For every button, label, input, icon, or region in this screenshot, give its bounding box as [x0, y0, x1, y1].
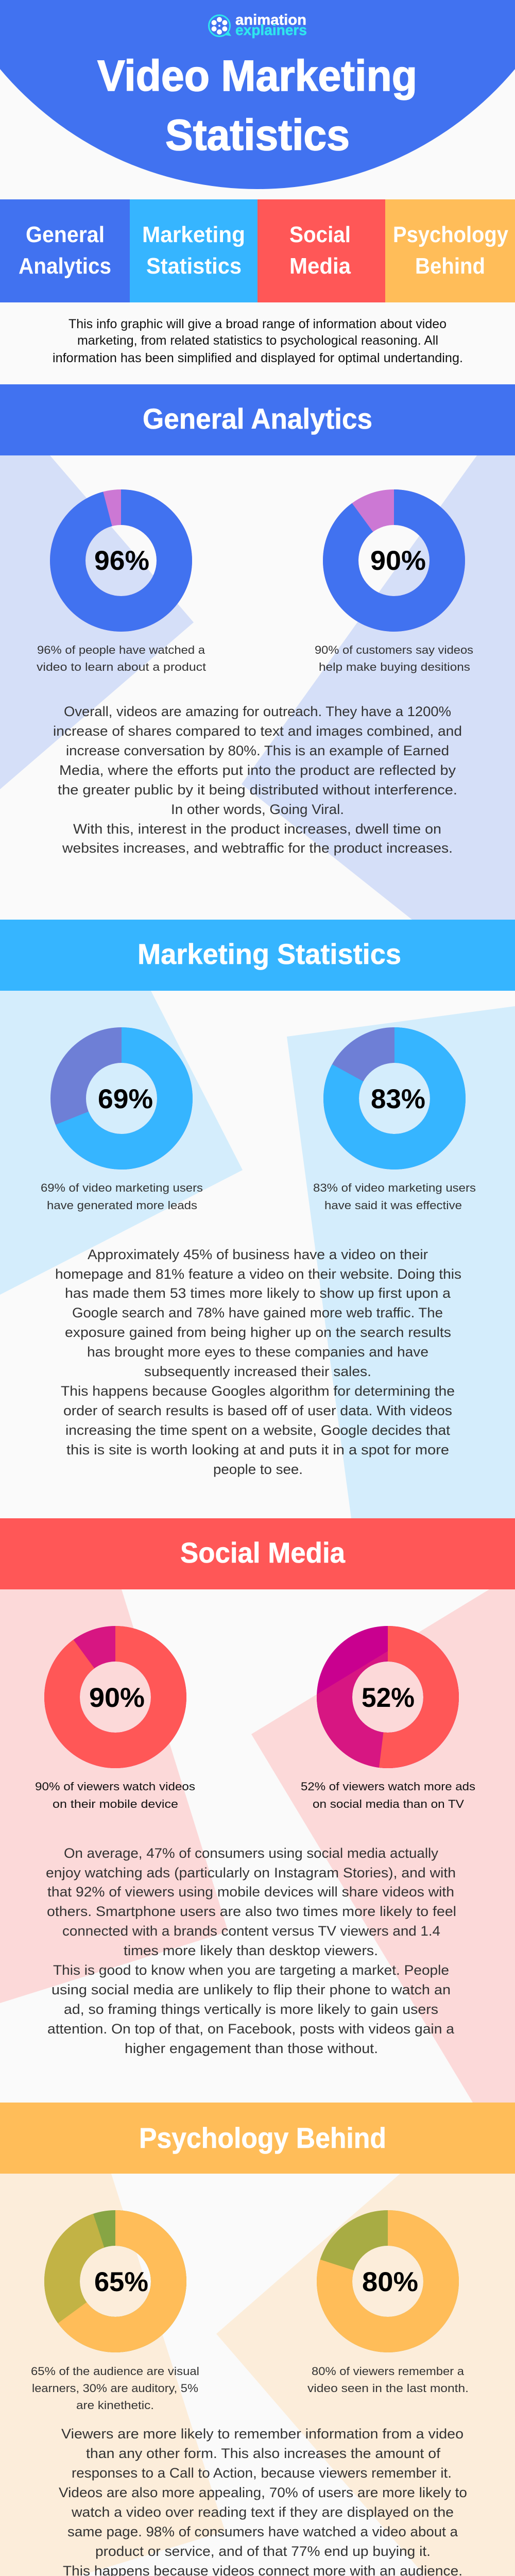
caption: 90%: 90% of viewers watch videos: [35, 1780, 195, 1793]
tab: Marketing Statistics: Statistics: [146, 253, 242, 279]
caption: 90%: [35, 1780, 195, 1810]
heading: Social Media: [180, 1536, 346, 1569]
body text: subsequently increased their sales.: [144, 1364, 371, 1379]
tab: Marketing Statistics: [130, 199, 258, 302]
intro text: information has been simplified and displayed for optimal undertanding.: [53, 351, 463, 365]
body text: the greater public by it being distributed without interference.: [58, 782, 457, 798]
tab: Psychology Behind: Behind: [415, 253, 485, 279]
body text: has made them 53 times more likely to show up first upon a: [65, 1285, 451, 1301]
panel: Social Media: [0, 1518, 515, 2103]
body text: Google search and 78% have gained more web traffic. The: [72, 1305, 443, 1320]
title: Statistics: [165, 111, 350, 159]
donut chart: 96%: [68, 507, 174, 614]
caption: 83%: have said it was effective: [324, 1199, 462, 1212]
body text: this is site is worth looking at and puts it in a spot for more: [66, 1442, 449, 1458]
caption: 52%: [301, 1780, 475, 1810]
donut chart: 65%: [62, 2228, 169, 2335]
caption: 90%: [315, 643, 473, 673]
body text: In other words, Going Viral.: [171, 802, 344, 817]
heading: Psychology Behind: [139, 2122, 386, 2154]
body text: using social media are unlikely to flip their phone to watch an: [52, 1982, 451, 1997]
body text: This happens because Googles algorithm for determining the: [61, 1383, 455, 1399]
donut chart: 90%: 90%: [370, 546, 426, 576]
tab: Marketing Statistics: Marketing: [142, 222, 245, 247]
body text: order of search results is based off of user data. With videos: [63, 1403, 452, 1418]
caption: 90%: 90% of customers say videos: [315, 643, 473, 656]
caption: 96%: video to learn about a product: [37, 660, 206, 673]
body text: increasing the time spent on a website, Google decides that: [65, 1422, 451, 1438]
caption: 52%: on social media than on TV: [313, 1798, 464, 1810]
body text: increase conversation by 80%. This is an example of Earned: [66, 743, 449, 758]
caption: 80%: [307, 2365, 469, 2395]
body text: exposure gained from being higher up on the search results: [65, 1325, 451, 1340]
body text: watch a video over reading text if they are displayed on the: [71, 2504, 454, 2520]
body text: Videos are also more appealing, 70% of users are more likely to: [59, 2485, 467, 2500]
tab: Social Media: [258, 199, 385, 302]
body text: Media, where the efforts put into the product are reflected by: [59, 762, 456, 778]
body text: same page. 98% of consumers have watched a video about a: [67, 2524, 458, 2539]
donut chart: 96%: 96%: [94, 546, 149, 576]
body text: With this, interest in the product increases, dwell time on: [73, 821, 441, 837]
tab: General Analytics: [0, 199, 130, 302]
body text: has brought more eyes to these companies and have: [87, 1344, 428, 1360]
caption: 65%: 65% of the audience are visual: [31, 2365, 199, 2378]
intro text: [53, 317, 463, 365]
tab: Social Media: Social: [289, 222, 351, 247]
navigation tabs: [0, 199, 515, 302]
caption: 80%: 80% of viewers remember a: [312, 2365, 465, 2378]
body text: ad, so framing things vertically is more likely to gain users: [64, 2002, 438, 2017]
body text: [55, 1247, 461, 1477]
panel: Psychology Behind: [0, 2103, 515, 2576]
body text: responses to a Call to Action, because viewers remember it.: [72, 2465, 452, 2481]
logo: animation explainers: [209, 12, 307, 39]
title: Video Marketing: [97, 52, 417, 100]
caption: 52%: 52% of viewers watch more ads: [301, 1780, 475, 1793]
body text: connected with a brands content versus TV viewers and 1.4: [62, 1923, 440, 1939]
body text: increase of shares compared to text and images combined, and: [53, 723, 462, 739]
body text: than any other form. This also increases the amount of: [86, 2446, 441, 2461]
caption: 83%: [313, 1181, 476, 1212]
donut chart: 90%: 90%: [89, 1683, 145, 1713]
body text: websites increases, and webtraffic for the product increases.: [62, 840, 453, 856]
caption: 65%: learners, 30% are auditory, 5%: [32, 2382, 198, 2395]
body text: people to see.: [213, 1462, 303, 1477]
caption: 80%: video seen in the last month.: [307, 2382, 469, 2395]
body text: homepage and 81% feature a video on their website. Doing this: [55, 1266, 461, 1282]
logo: animation explainers: explainers: [235, 22, 307, 39]
body text: This is good to know when you are targeting a market. People: [53, 1962, 449, 1978]
body text: On average, 47% of consumers using social media actually: [64, 1845, 439, 1861]
body text: that 92% of viewers using mobile devices will share videos with: [47, 1884, 454, 1900]
intro text: This info graphic will give a broad range of information about video: [68, 317, 447, 331]
body text: Approximately 45% of business have a video on their: [88, 1247, 428, 1262]
body text: product or service, and of that 77% end up buying it.: [95, 2544, 431, 2559]
caption: 69%: have generated more leads: [47, 1199, 197, 1212]
tab: General Analytics: Analytics: [19, 253, 111, 279]
body text: attention. On top of that, on Facebook, posts with videos gain a: [47, 2021, 455, 2037]
caption: 90%: help make buying desitions: [319, 660, 470, 673]
donut chart: 80%: [335, 2228, 441, 2335]
body text: others. Smartphone users are also two times more likely to feel: [47, 1904, 456, 1919]
body text: Viewers are more likely to remember information from a video: [61, 2426, 464, 2442]
donut chart: 83%: [341, 1045, 448, 1152]
body text: [53, 704, 462, 856]
title: [97, 52, 417, 159]
logo: animation explainers: animation: [235, 12, 306, 28]
donut chart: 83%: 83%: [371, 1084, 425, 1114]
body text: higher engagement than those without.: [125, 2041, 378, 2056]
caption: 69%: 69% of video marketing users: [41, 1181, 203, 1194]
caption: 96%: 96% of people have watched a: [37, 643, 205, 656]
donut chart: 90%: [62, 1643, 169, 1751]
caption: 65%: [31, 2365, 199, 2412]
panel: Marketing Statistics: [0, 920, 515, 1518]
body text: [58, 2426, 468, 2576]
caption: 69%: [41, 1181, 203, 1212]
donut chart: 69%: 69%: [98, 1084, 153, 1114]
tab: General Analytics: General: [26, 222, 105, 247]
body text: enjoy watching ads (particularly on Instagram Stories), and with: [46, 1865, 456, 1880]
caption: 65%: are kinethetic.: [76, 2399, 154, 2412]
hero banner: [0, 0, 515, 189]
body text: [46, 1845, 456, 2056]
caption: 83%: 83% of video marketing users: [313, 1181, 476, 1194]
donut chart: 69%: [68, 1045, 175, 1152]
caption: 96%: [37, 643, 206, 673]
heading: General Analytics: [143, 402, 372, 435]
heading: Marketing Statistics: [138, 938, 401, 970]
body text: Overall, videos are amazing for outreach. They have a 1200%: [64, 704, 451, 719]
donut chart: 52%: 52%: [362, 1683, 415, 1713]
donut chart: 90%: [341, 507, 447, 614]
body text: times more likely than desktop viewers.: [124, 1943, 378, 1958]
tab: Social Media: Media: [289, 253, 351, 279]
intro text: marketing, from related statistics to psychological reasoning. All: [77, 333, 438, 348]
caption: 90%: on their mobile device: [53, 1798, 178, 1810]
donut chart: 52%: [335, 1643, 441, 1751]
donut chart: 80%: 80%: [362, 2267, 418, 2297]
donut chart: 65%: 65%: [94, 2267, 148, 2297]
tab: Psychology Behind: [385, 199, 515, 302]
panel: General Analytics: [0, 384, 515, 920]
